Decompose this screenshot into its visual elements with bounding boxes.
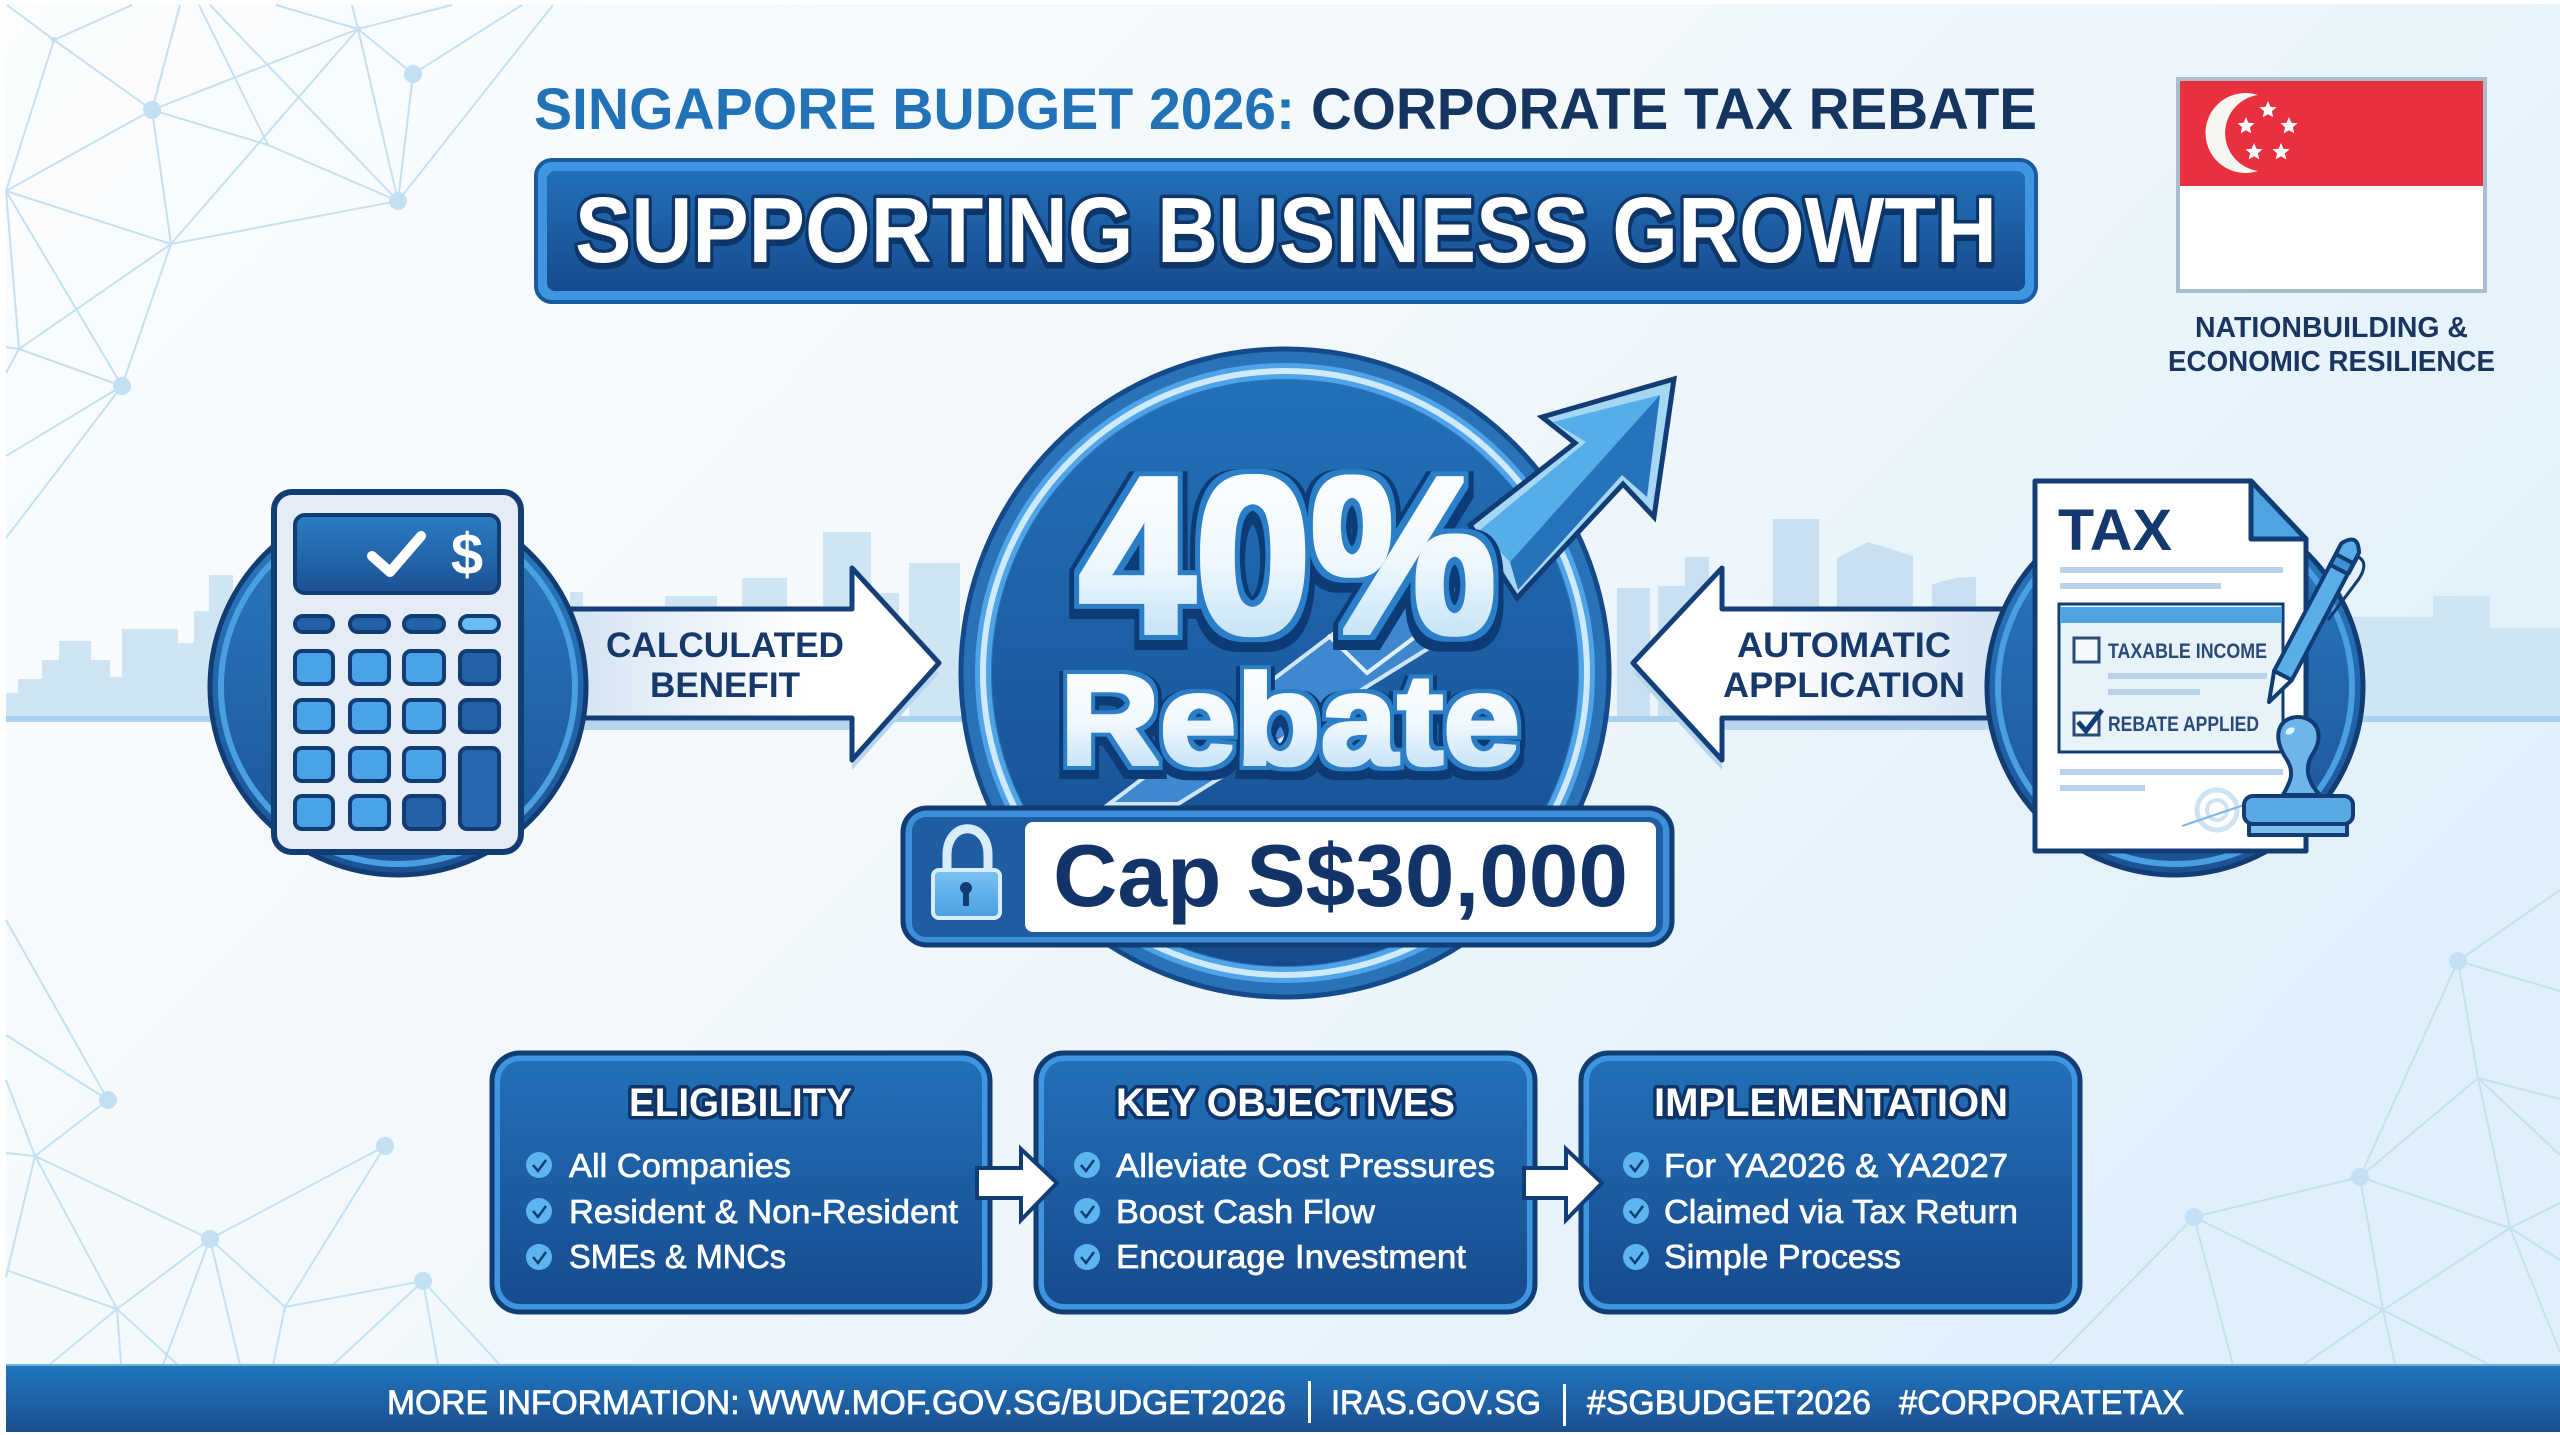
list: objectives items	[1074, 1147, 1495, 1275]
list: implementation items: Claimed via Tax Return	[1664, 1193, 2018, 1230]
icon: stamp	[2244, 717, 2353, 835]
40% figure: 40%	[1079, 432, 1496, 680]
title	[534, 77, 2037, 142]
flag caption: NATIONBUILDING &	[2195, 312, 2468, 344]
icon: calculator: $	[451, 522, 483, 587]
footer: IRAS.GOV.SG	[1331, 1384, 1541, 1422]
flag caption	[2168, 312, 2495, 378]
banner: supporting business growth: SUPPORTING BUSINESS GROWTH	[575, 178, 1997, 282]
list: objectives items: Alleviate Cost Pressures	[1116, 1147, 1495, 1184]
banner: supporting business growth	[536, 160, 2036, 302]
icon: tax document with pen and stamp	[1987, 481, 2374, 875]
panel: eligibility	[492, 1053, 990, 1312]
label: automatic application	[1723, 626, 1965, 705]
icon: tax document with pen and stamp: REBATE APPLIED	[2108, 713, 2259, 736]
icon: tax document with pen and stamp: TAXABLE INCOME	[2108, 640, 2267, 663]
icon: lock	[933, 829, 1000, 918]
footer: #CORPORATETAX	[1899, 1384, 2184, 1422]
arrow: objectives to implementation	[1524, 1149, 1602, 1220]
label: automatic application: APPLICATION	[1723, 666, 1965, 705]
heading: implementation: IMPLEMENTATION	[1654, 1081, 2008, 1125]
arrow: automatic application	[1633, 568, 2010, 770]
list: implementation items: Simple Process	[1664, 1238, 1901, 1275]
flag of Singapore	[2178, 79, 2485, 291]
label: calculated benefit	[606, 626, 844, 705]
icon: tax document with pen and stamp: TAX	[2058, 498, 2172, 563]
growth arrow	[1109, 379, 1674, 804]
cap bar	[903, 808, 1672, 945]
icon: calculator	[210, 492, 586, 875]
list: implementation items: For YA2026 & YA2027	[1664, 1147, 2008, 1184]
arrow: calculated benefit	[560, 568, 939, 770]
flag caption: ECONOMIC RESILIENCE	[2168, 346, 2495, 378]
panel: key objectives	[1036, 1053, 1535, 1312]
footer: #SGBUDGET2026	[1587, 1384, 1871, 1422]
list: eligibility items: Resident & Non-Resident	[569, 1193, 958, 1230]
network pattern: bottom right	[2049, 890, 2560, 1365]
network pattern: bottom left	[6, 920, 500, 1365]
heading: eligibility: ELIGIBILITY	[629, 1081, 852, 1125]
icon: pen	[2260, 535, 2374, 712]
footer: MORE INFORMATION: WWW.MOF.GOV.SG/BUDGET2026	[387, 1384, 1286, 1422]
40% rebate badge	[961, 349, 1674, 997]
rebate word: Rebate	[1060, 649, 1520, 792]
label: calculated benefit: CALCULATED	[606, 626, 844, 665]
list: eligibility items: SMEs & MNCs	[569, 1238, 786, 1275]
footer	[6, 1364, 2560, 1432]
label: automatic application: AUTOMATIC	[1737, 626, 1951, 665]
cap amount: Cap S$30,000	[1053, 826, 1628, 925]
arrow: eligibility to objectives	[977, 1149, 1057, 1220]
list: implementation items	[1623, 1147, 2018, 1275]
list: eligibility items: All Companies	[569, 1147, 791, 1184]
list: eligibility items	[526, 1147, 958, 1275]
network pattern: top left	[6, 5, 553, 538]
panel: implementation	[1581, 1053, 2080, 1312]
list: objectives items: Boost Cash Flow	[1116, 1193, 1375, 1230]
title: CORPORATE TAX REBATE	[1311, 77, 2037, 142]
skyline	[6, 519, 2560, 722]
label: calculated benefit: BENEFIT	[650, 666, 800, 705]
list: objectives items: Encourage Investment	[1116, 1238, 1466, 1275]
title: SINGAPORE BUDGET 2026:	[534, 77, 1295, 142]
heading: key objectives: KEY OBJECTIVES	[1116, 1081, 1455, 1125]
